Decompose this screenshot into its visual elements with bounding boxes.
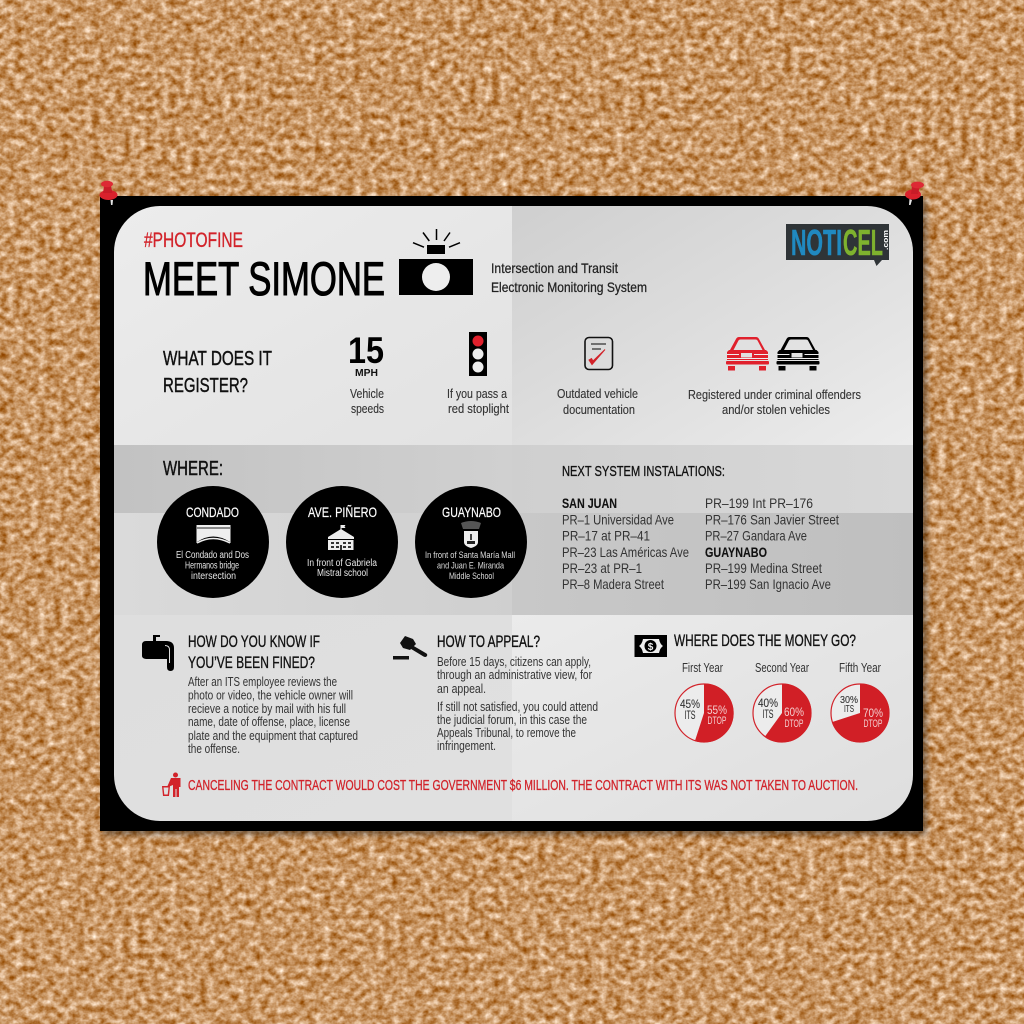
location: Condado: intersection xyxy=(191,571,236,582)
heading: where: WHERE: xyxy=(163,458,223,480)
label: vehicle speeds xyxy=(350,386,384,416)
pin: right xyxy=(905,182,924,205)
label: criminal offenders: and/or stolen vehicles xyxy=(722,402,830,417)
section: how do you know: photo or video, the vehicle owner will xyxy=(188,688,353,702)
hashtag: #PHOTOFINE xyxy=(144,229,243,252)
location: Ave. Piñero: Mistral school xyxy=(317,568,368,579)
location: Condado: El Condado and Dos xyxy=(176,550,249,561)
pie chart: second year xyxy=(753,660,811,742)
pie chart: fifth year: 70% xyxy=(863,708,883,720)
icon: 15 mph: 15 xyxy=(348,330,384,371)
icon: traffic light xyxy=(469,332,487,376)
label: criminal offenders xyxy=(688,387,861,417)
pie chart: second year: 40% xyxy=(758,698,778,710)
pie chart: fifth year: DTOP xyxy=(864,718,882,730)
section: how do you know: HOW DO YOU KNOW IF xyxy=(188,632,320,651)
list: San Juan: PR–23 Las Américas Ave xyxy=(562,544,689,560)
section: how do you know: recieve a notice by mail with his full xyxy=(188,702,346,716)
heading: what does it register: WHAT DOES IT xyxy=(163,348,272,370)
section: how do you know: After an ITS employee reviews the xyxy=(188,675,337,689)
heading: what does it register: REGISTER? xyxy=(163,375,248,397)
list: San Juan: PR–23 at PR–1 xyxy=(562,560,642,576)
location: Guaynabo xyxy=(415,486,527,598)
section: how to appeal xyxy=(437,632,598,753)
pie chart: fifth year xyxy=(831,660,889,742)
icon: 15 mph: MPH xyxy=(355,367,378,379)
subtitle: Intersection and Transit xyxy=(491,260,618,276)
label: vehicle speeds: speeds xyxy=(351,401,384,416)
heading: where does the money go: WHERE DOES THE MONEY GO? xyxy=(674,631,856,650)
section: how do you know: plate and the equipment that captured xyxy=(188,729,358,743)
section: how do you know: YOU’VE BEEN FINED? xyxy=(188,653,315,672)
label: outdated documentation: documentation xyxy=(563,402,635,417)
icon: money bill: $ xyxy=(648,642,654,653)
location: Guaynabo: In front of Santa María Mall xyxy=(425,550,515,561)
location: Guaynabo: GUAYNABO xyxy=(442,504,501,520)
heading: next installations: NEXT SYSTEM INSTALATIONS: xyxy=(562,463,725,480)
label: red stoplight: If you pass a xyxy=(447,386,508,401)
icon: money bill xyxy=(634,635,667,657)
section: how to appeal: Before 15 days, citizens can apply, xyxy=(437,655,591,669)
label: red stoplight: red stoplight xyxy=(448,401,509,416)
section: how to appeal: the judicial forum, in this case the xyxy=(437,713,587,727)
pie chart: fifth year: 30% xyxy=(840,694,858,706)
icon: document check xyxy=(585,338,612,370)
section: what does it register xyxy=(163,330,861,417)
icon: red car xyxy=(726,337,769,370)
heading: what does it register xyxy=(163,348,272,397)
location: Condado: Hermanos bridge xyxy=(185,560,239,572)
location: Guaynabo: and Juan E. Miranda xyxy=(437,560,505,572)
list: San Juan continued and Guaynabo: PR–199 Int PR–176 xyxy=(705,495,813,511)
label: vehicle speeds: Vehicle xyxy=(350,386,384,401)
list: San Juan continued and Guaynabo: PR–199 San Ignacio Ave xyxy=(705,576,831,592)
subtitle xyxy=(491,260,647,295)
logo: Noticel: NOTI xyxy=(791,222,842,263)
icon: gavel xyxy=(393,636,427,660)
pie chart: first year: 45% xyxy=(680,699,700,711)
location: Ave. Piñero: AVE. PIÑERO xyxy=(308,504,377,520)
list: San Juan continued and Guaynabo xyxy=(705,495,839,592)
location: Ave. Piñero: In front of Gabriela xyxy=(307,558,377,569)
logo: Noticel: .com xyxy=(881,230,890,250)
section: how to appeal: If still not satisfied, you could attend xyxy=(437,700,598,714)
section: how do you know: name, date of offense, place, license xyxy=(188,715,350,729)
location: Condado: CONDADO xyxy=(186,504,239,520)
list: San Juan: PR–17 at PR–41 xyxy=(562,528,650,544)
pie chart: second year: DTOP xyxy=(784,718,804,730)
pie chart: first year: DTOP xyxy=(708,715,726,727)
icon: black car xyxy=(776,337,820,370)
icon: mailbox xyxy=(142,635,174,671)
logo: Noticel: CEL xyxy=(843,222,883,263)
list: San Juan: PR–8 Madera Street xyxy=(562,576,664,592)
list: San Juan continued and Guaynabo: PR–27 Gandara Ave xyxy=(705,528,807,544)
pin: left xyxy=(100,181,118,205)
section: how do you know: the offense. xyxy=(188,742,240,756)
section: how to appeal: an appeal. xyxy=(437,682,486,696)
pie chart: first year: 55% xyxy=(707,705,727,717)
location: Guaynabo: Middle School xyxy=(449,571,494,582)
section: how do you know xyxy=(188,632,358,756)
pie chart: first year: First Year xyxy=(682,660,723,675)
icon: person with trash bin xyxy=(162,772,180,797)
poster xyxy=(100,196,927,835)
pie chart: first year xyxy=(675,660,734,742)
list: San Juan xyxy=(562,495,689,592)
pie chart: fifth year: ITS xyxy=(844,703,854,715)
section: how to appeal: through an administrative view, for xyxy=(437,668,592,682)
section: how to appeal: HOW TO APPEAL? xyxy=(437,632,540,651)
label: red stoplight xyxy=(447,386,509,416)
location: Ave. Piñero xyxy=(286,486,398,598)
section: how to appeal: infringement. xyxy=(437,739,496,753)
icon: school xyxy=(328,525,354,550)
list: San Juan continued and Guaynabo: PR–176 San Javier Street xyxy=(705,512,839,528)
icon: coat of arms xyxy=(461,521,481,548)
pie chart: second year: ITS xyxy=(762,709,774,721)
icon: bridge xyxy=(196,525,230,544)
pie chart: second year: Second Year xyxy=(755,660,809,675)
label: outdated documentation xyxy=(557,386,638,417)
label: outdated documentation: Outdated vehicle xyxy=(557,386,638,401)
pie chart: second year: 60% xyxy=(784,707,804,719)
title: MEET SIMONE xyxy=(143,252,385,305)
list: San Juan: SAN JUAN xyxy=(562,495,617,511)
subtitle: Electronic Monitoring System xyxy=(491,279,647,295)
section: how to appeal: Appeals Tribunal, to remove the xyxy=(437,726,576,740)
icon: camera with flash xyxy=(399,229,473,295)
location: Condado xyxy=(157,486,269,598)
list: San Juan continued and Guaynabo: GUAYNABO xyxy=(705,544,767,560)
label: criminal offenders: Registered under criminal offenders xyxy=(688,387,861,402)
pie chart: fifth year: Fifth Year xyxy=(839,660,882,675)
pie chart: first year: ITS xyxy=(684,710,696,722)
list: San Juan: PR–1 Universidad Ave xyxy=(562,512,674,528)
list: San Juan continued and Guaynabo: PR–199 Medina Street xyxy=(705,560,822,576)
